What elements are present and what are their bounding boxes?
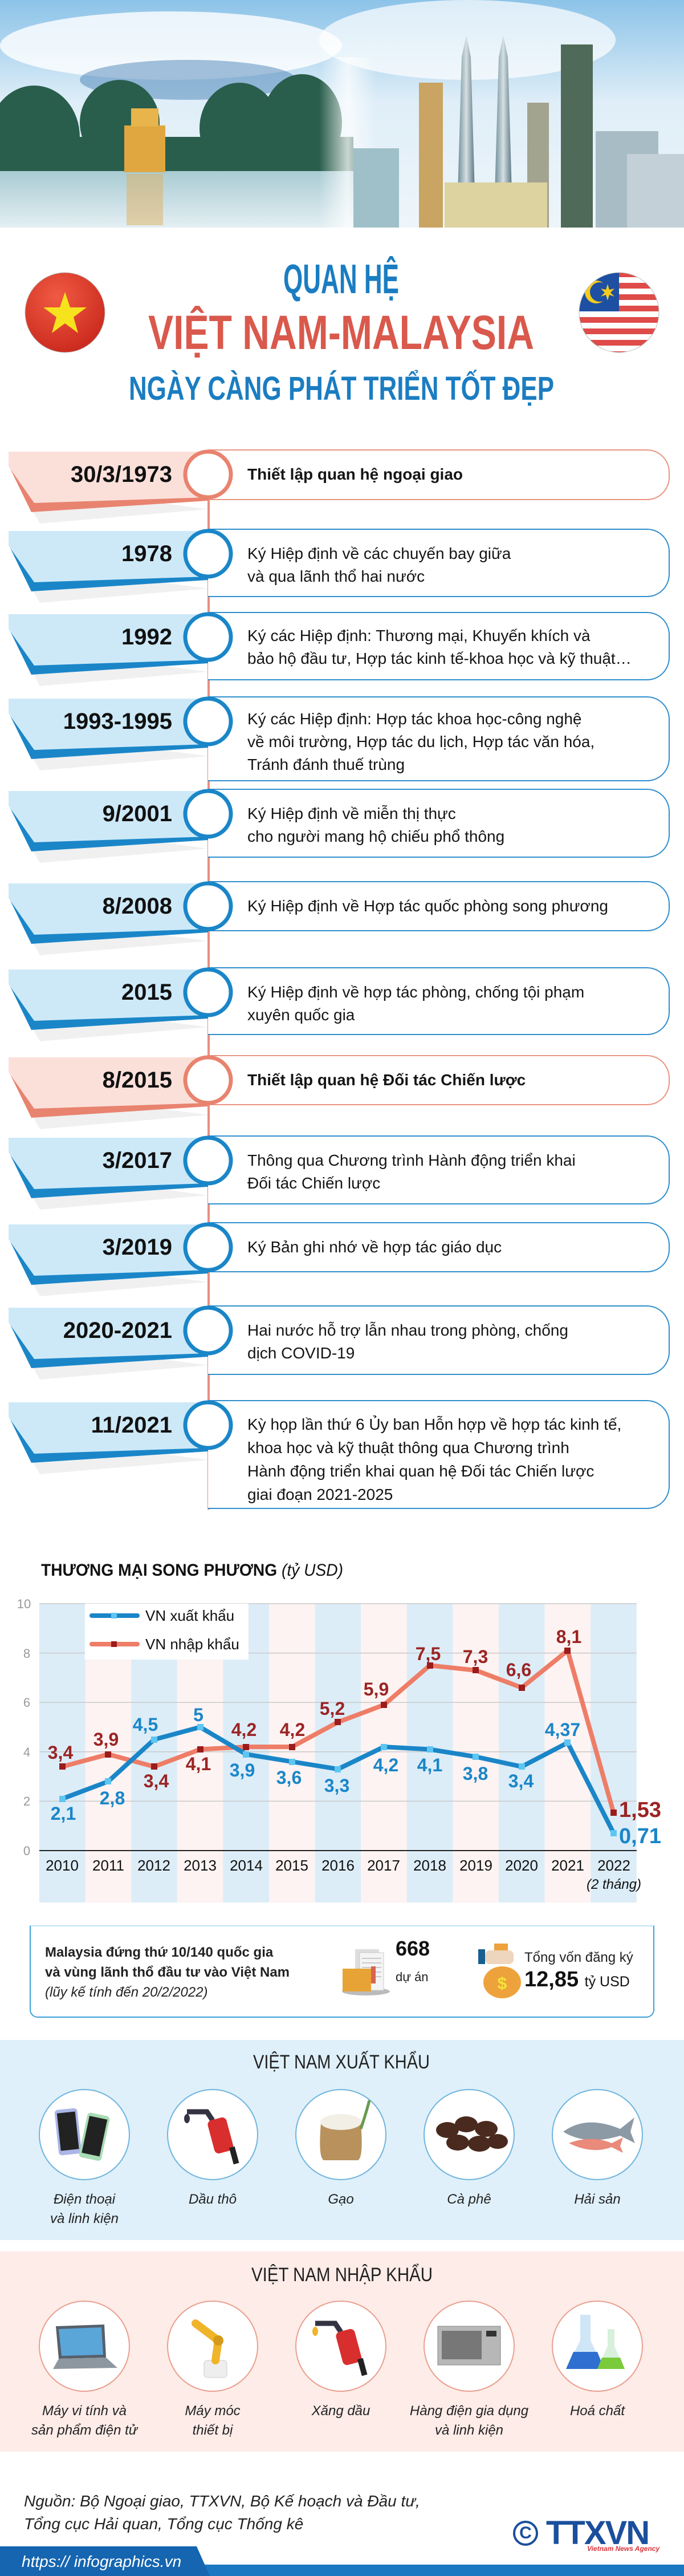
- timeline row 11/2021: khoa học và kỹ thuật thông qua Chương trình: [247, 1439, 569, 1457]
- timeline row 3/2017: Thông qua Chương trình Hành động triển khai: [247, 1151, 576, 1169]
- timeline row 1978: Ký Hiệp định về các chuyến bay giữa: [247, 545, 511, 562]
- timeline row 9/2001: [9, 789, 670, 863]
- investment panel: [30, 1925, 654, 2018]
- timeline row 1973: Thiết lập quan hệ ngoại giao: [247, 465, 463, 483]
- year labels: 2019: [459, 1857, 492, 1874]
- chart: bilateral trade: [17, 1561, 661, 1902]
- timeline row 8/2015: [9, 1055, 670, 1129]
- flag: Vietnam: [25, 273, 105, 352]
- icon: fuel pump nozzle: [295, 2301, 386, 2392]
- icon: robot arm: [167, 2301, 258, 2392]
- investment panel: 12,85 tỷ USD: [524, 1968, 630, 1991]
- y axis labels: 6: [23, 1695, 30, 1710]
- timeline row 2015: Ký Hiệp định về hợp tác phòng, chống tội phạm: [247, 983, 584, 1001]
- icon: coffee beans: [424, 2089, 515, 2180]
- timeline row 11/2021: 11/2021: [91, 1413, 172, 1438]
- import value labels: 8,1: [556, 1626, 581, 1647]
- investment ranking text: [45, 1945, 290, 2000]
- timeline row 8/2015: Thiết lập quan hệ Đối tác Chiến lược: [247, 1071, 526, 1089]
- import value labels: 3,9: [93, 1729, 119, 1750]
- export value labels: 3,9: [230, 1760, 255, 1780]
- panel: Vietnam imports: Hoá chất: [570, 2403, 625, 2419]
- title: QUAN HỆ: [283, 256, 399, 302]
- y axis labels: [17, 1597, 31, 1858]
- icon: chemical flasks: [552, 2301, 643, 2392]
- timeline row 1973: [9, 449, 670, 524]
- heading: exports: VIỆT NAM XUẤT KHẨU: [253, 2051, 430, 2073]
- timeline row 9/2001: cho người mang hộ chiếu phổ thông: [247, 827, 504, 845]
- pagoda: [124, 125, 165, 172]
- timeline row 9/2001: Ký Hiệp định về miễn thị thực: [247, 805, 456, 822]
- timeline row 1993-1995: Tránh đánh thuế trùng: [247, 756, 405, 773]
- year labels: 2022: [597, 1857, 630, 1874]
- panel: Vietnam exports: Dầu thô: [189, 2192, 237, 2207]
- timeline row 1992: bảo hộ đầu tư, Hợp tác kinh tế-khoa học và kỹ thuật…: [247, 650, 632, 667]
- import labels: [31, 2403, 138, 2438]
- timeline row 2020-2021: [9, 1305, 670, 1380]
- timeline row 1993-1995: Ký các Hiệp định: Hợp tác khoa học-công nghệ: [247, 710, 581, 728]
- import value labels: 3,4: [48, 1742, 73, 1763]
- icon: microwave: [424, 2301, 515, 2392]
- import value labels: 4,2: [280, 1719, 305, 1740]
- export value labels: 3,8: [463, 1763, 488, 1784]
- timeline row 11/2021: Hành động triển khai quan hệ Đối tác Chiến lược: [247, 1462, 594, 1480]
- export value labels: [51, 1705, 661, 1848]
- timeline row 1978: [9, 529, 670, 603]
- panel: Vietnam imports: [0, 2252, 684, 2452]
- year labels: 2012: [137, 1857, 170, 1874]
- import value labels: 7,5: [416, 1644, 441, 1664]
- legend: [85, 1604, 249, 1660]
- export value labels: 4,2: [373, 1755, 398, 1775]
- y axis labels: 8: [23, 1646, 30, 1661]
- import value labels: 5,9: [364, 1679, 389, 1699]
- heading: imports: VIỆT NAM NHẬP KHẨU: [251, 2264, 433, 2286]
- import value labels: [48, 1626, 661, 1822]
- y axis labels: 0: [23, 1844, 30, 1858]
- timeline row 3/2017: Đối tác Chiến lược: [247, 1174, 380, 1192]
- timeline row 1978: và qua lãnh thổ hai nước: [247, 567, 425, 585]
- import value labels: 3,4: [144, 1771, 169, 1791]
- export value labels: 4,1: [417, 1755, 442, 1775]
- export labels: [50, 2192, 119, 2226]
- icon: fish: [552, 2089, 643, 2180]
- panel: Vietnam exports: Cà phê: [447, 2192, 491, 2207]
- legend: VN xuất khẩu: [145, 1607, 234, 1624]
- export value labels: 2,1: [51, 1803, 76, 1824]
- flag: Malaysia: [579, 273, 659, 352]
- timeline vertical line: [207, 474, 210, 1510]
- import labels: Máy vi tính và: [42, 2403, 127, 2419]
- export value labels: 4,5: [133, 1714, 158, 1735]
- export value labels: 4,37: [545, 1719, 580, 1740]
- import line: [59, 1648, 617, 1816]
- import value labels: 4,2: [231, 1719, 256, 1740]
- timeline row 1993-1995: về môi trường, Hợp tác du lịch, Hợp tác văn hóa,: [247, 733, 595, 751]
- timeline row 3/2019: 3/2019: [103, 1235, 172, 1260]
- import value labels: 1,53: [619, 1798, 661, 1822]
- footer bar: https:// infographics.vn: [22, 2553, 181, 2570]
- timeline row 8/2008: 8/2008: [103, 894, 172, 919]
- timeline row 3/2017: [9, 1135, 670, 1210]
- export value labels: 5: [193, 1705, 203, 1725]
- panel: Vietnam imports: Xăng dầu: [312, 2403, 370, 2419]
- legend: VN nhập khẩu: [145, 1636, 239, 1653]
- timeline row 3/2019: Ký Bản ghi nhớ về hợp tác giáo dục: [247, 1238, 502, 1256]
- export labels: và linh kiện: [50, 2211, 119, 2226]
- timeline row 2015: 2015: [121, 980, 172, 1005]
- timeline row 1992: Ký các Hiệp định: Thương mại, Khuyến khích và: [247, 627, 591, 644]
- panel: Vietnam imports: Máy móc: [185, 2403, 241, 2419]
- title: NGÀY CÀNG PHÁT TRIỂN TỐT ĐẸP: [129, 370, 554, 407]
- year labels: 2016: [321, 1857, 355, 1874]
- y axis labels: 4: [23, 1745, 30, 1759]
- year labels: 2010: [46, 1857, 79, 1874]
- import value labels: 4,1: [186, 1754, 211, 1774]
- icon: laptop: [39, 2301, 130, 2392]
- timeline row 11/2021: [9, 1400, 670, 1509]
- timeline row 2015: xuyên quốc gia: [247, 1006, 355, 1024]
- year labels: 2014: [230, 1857, 263, 1874]
- year labels: 2017: [367, 1857, 400, 1874]
- timeline row 8/2015: 8/2015: [103, 1068, 172, 1093]
- icon: money bag: [478, 1944, 521, 1998]
- year labels: [46, 1857, 641, 1892]
- panel: Vietnam imports: và linh kiện: [435, 2423, 503, 2438]
- stat: capital: Tổng vốn đăng ký: [524, 1950, 633, 1965]
- timeline row 8/2008: [9, 881, 670, 955]
- logo: TTXVN: C: [519, 2524, 532, 2542]
- year labels: 2015: [275, 1857, 308, 1874]
- panel: Vietnam exports: [0, 2040, 684, 2240]
- investment ranking text: Malaysia đứng thứ 10/140 quốc gia: [45, 1945, 273, 1960]
- year labels: 2018: [413, 1857, 446, 1874]
- timeline row 3/2017: 3/2017: [103, 1148, 172, 1173]
- panel: Vietnam imports: thiết bị: [193, 2423, 233, 2438]
- header photo: [0, 0, 684, 228]
- footer bar: [0, 2546, 684, 2576]
- icon: phones: [39, 2089, 130, 2180]
- trees left: [0, 74, 353, 188]
- timeline row 11/2021: giai đoạn 2021-2025: [247, 1486, 393, 1503]
- investment panel: dự án: [396, 1970, 429, 1984]
- skyline right: [353, 148, 399, 228]
- timeline row 11/2021: Kỳ họp lần thứ 6 Ủy ban Hỗn hợp về hợp tác kinh tế,: [247, 1415, 621, 1433]
- y axis labels: 10: [17, 1597, 31, 1611]
- year labels: (2 tháng): [587, 1877, 641, 1892]
- source note: Tổng cục Hải quan, Tổng cục Thống kê: [24, 2515, 303, 2533]
- chart title: THƯƠNG MẠI SONG PHƯƠNG (tỷ USD): [41, 1561, 343, 1580]
- import value labels: 7,3: [463, 1646, 488, 1667]
- icon: money bag: $: [498, 1974, 507, 1993]
- export line: [59, 1724, 617, 1836]
- title: VIỆT NAM-MALAYSIA: [148, 306, 534, 359]
- timeline row 1993-1995: [9, 696, 670, 781]
- timeline row 1993-1995: 1993-1995: [63, 709, 172, 734]
- title: [129, 256, 554, 407]
- year labels: 2021: [551, 1857, 584, 1874]
- timeline row 3/2019: [9, 1222, 670, 1296]
- timeline row 2015: [9, 967, 670, 1041]
- export value labels: 3,4: [508, 1771, 534, 1791]
- investment ranking text: (lũy kế tính đến 20/2/2022): [45, 1985, 208, 2000]
- timeline row 1992: [9, 612, 670, 686]
- import value labels: 5,2: [320, 1698, 345, 1719]
- timeline row 2020-2021: Hai nước hỗ trợ lẫn nhau trong phòng, chống: [247, 1321, 568, 1339]
- icon: fuel nozzle: [167, 2089, 258, 2180]
- timeline row 9/2001: 9/2001: [103, 801, 172, 826]
- export labels: Điện thoại: [54, 2192, 115, 2207]
- year labels: 2013: [184, 1857, 217, 1874]
- investment ranking text: và vùng lãnh thổ đầu tư vào Việt Nam: [45, 1965, 290, 1980]
- logo: TTXVN: TTXVN: [546, 2514, 649, 2551]
- import value labels: 6,6: [506, 1660, 531, 1680]
- export value labels: 3,6: [276, 1767, 302, 1788]
- year labels: 2011: [92, 1857, 124, 1874]
- icon: rice bag: [295, 2089, 386, 2180]
- panel: Vietnam exports: Gạo: [328, 2192, 354, 2207]
- stat: projects: 668: [396, 1937, 430, 1960]
- import labels: sản phẩm điện tử: [31, 2423, 137, 2438]
- timeline row 1978: 1978: [121, 541, 172, 566]
- export value labels: 2,8: [100, 1788, 125, 1808]
- source note: Nguồn: Bộ Ngoại giao, TTXVN, Bộ Kế hoạch và Đầu tư,: [24, 2492, 420, 2510]
- timeline row 1992: 1992: [121, 624, 172, 650]
- panel: Vietnam exports: Hải sản: [574, 2192, 621, 2207]
- panel: Vietnam imports: Hàng điện gia dụng: [410, 2403, 528, 2419]
- icon: folder: [342, 1949, 390, 1995]
- y axis labels: 2: [23, 1794, 30, 1808]
- source note: [24, 2492, 420, 2533]
- timeline row 2020-2021: 2020-2021: [63, 1318, 172, 1343]
- export value labels: 0,71: [619, 1824, 661, 1848]
- export value labels: 3,3: [324, 1775, 349, 1796]
- timeline row 2020-2021: dịch COVID-19: [247, 1344, 355, 1362]
- timeline row 1973: 30/3/1973: [71, 462, 172, 487]
- logo: TTXVN: [513, 2514, 660, 2553]
- year labels: 2020: [505, 1857, 538, 1874]
- timeline row 8/2008: Ký Hiệp định về Hợp tác quốc phòng song phương: [247, 897, 608, 915]
- logo: TTXVN: Vietnam News Agency: [587, 2545, 659, 2553]
